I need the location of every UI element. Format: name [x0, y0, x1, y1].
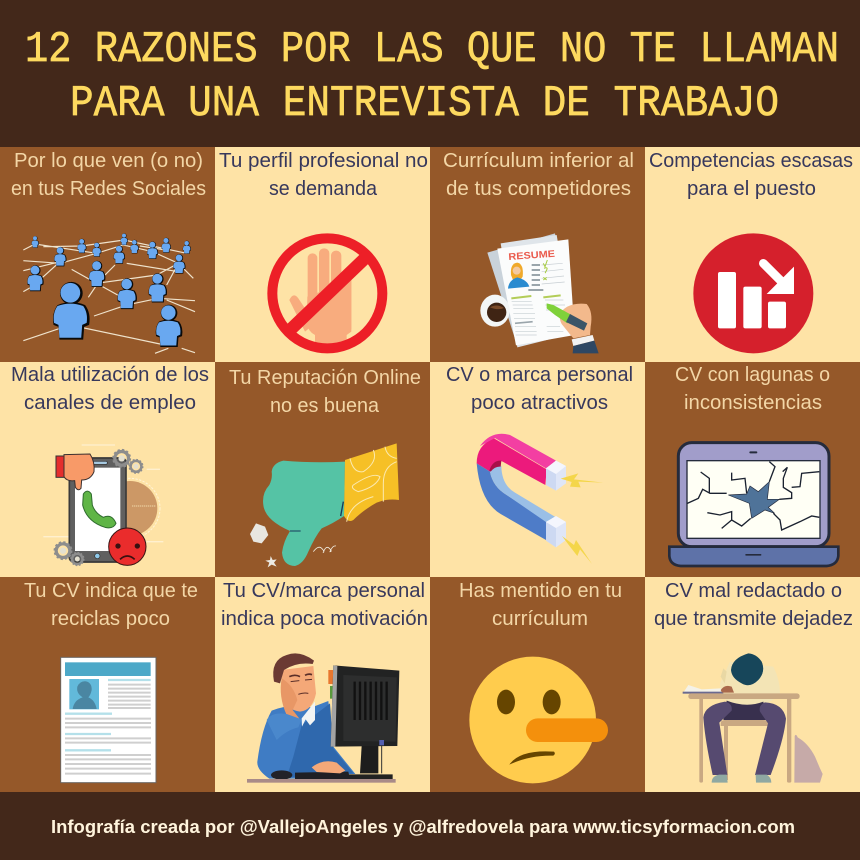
heading: curriculum inferior	[443, 149, 634, 200]
heading: has mentido	[459, 579, 622, 630]
icon: network of people	[23, 233, 195, 353]
heading: perfil profesional: se demanda	[269, 177, 378, 200]
icon: cracked laptop	[669, 443, 838, 566]
title: PARA UNA ENTREVISTA DE TRABAJO	[70, 79, 779, 129]
panel: lagunas	[645, 362, 860, 577]
heading: curriculum inferior: de tus competidores	[446, 177, 631, 200]
heading: poca motivacion: Tu CV/marca personal	[223, 579, 425, 602]
heading: perfil profesional	[219, 149, 428, 200]
panel: canales de empleo	[0, 362, 215, 577]
heading: competencias escasas	[649, 149, 853, 200]
icon: thumb down	[250, 443, 399, 567]
panel: competencias escasas	[645, 147, 860, 362]
heading: cv poco atractivo	[446, 363, 633, 414]
icon: phone with thumb down and sad face	[43, 445, 163, 565]
heading: canales de empleo: Mala utilización de los	[11, 363, 209, 386]
heading: cv poco atractivo: CV o marca personal	[446, 363, 633, 386]
heading: lagunas: CV con lagunas o	[675, 363, 830, 386]
heading: reputacion online: no es buena	[270, 394, 380, 417]
panel: mal redactado	[645, 577, 860, 792]
heading: poca motivacion: indica poca motivación	[221, 607, 428, 630]
heading: curriculum inferior: Currículum inferior al	[443, 149, 634, 172]
heading: canales de empleo: canales de empleo	[24, 391, 196, 414]
panel: perfil profesional	[215, 147, 430, 362]
heading: competencias escasas: para el puesto	[687, 177, 816, 200]
icon: student asleep at desk	[683, 653, 823, 783]
panel: te reciclas poco	[0, 577, 215, 792]
icon: bored man at computer	[247, 653, 399, 783]
icon: cv document	[61, 657, 156, 783]
heading: lagunas	[675, 363, 830, 414]
heading: has mentido: currículum	[492, 607, 588, 630]
icon: falling bar chart	[693, 233, 813, 353]
heading: reputacion online: Tu Reputación Online	[229, 366, 421, 389]
heading: lagunas: inconsistencias	[684, 391, 822, 414]
footer credit: Infografía creada por @VallejoAngeles y @alfredovela para www.ticsyformacion.com	[51, 817, 795, 837]
heading: mal redactado: que transmite dejadez	[654, 607, 853, 630]
footer band	[0, 792, 860, 860]
panel: reputacion online	[215, 362, 430, 577]
header band	[0, 0, 860, 147]
heading: reputacion online	[229, 366, 421, 417]
icon: prohibited hand	[272, 238, 382, 348]
heading: poca motivacion	[221, 579, 428, 630]
panel: poca motivacion	[215, 577, 430, 792]
heading: mal redactado: CV mal redactado o	[665, 579, 842, 602]
heading: redes sociales: en tus Redes Sociales	[11, 177, 206, 200]
icon: magnet	[477, 434, 603, 564]
panel: cv poco atractivo	[430, 362, 645, 577]
heading: te reciclas poco: reciclas poco	[51, 607, 170, 630]
icon: resume with marker: RESUME	[508, 249, 556, 263]
heading: redes sociales	[11, 149, 206, 200]
heading: competencias escasas: Competencias escasas	[649, 149, 853, 172]
panel: has mentido	[430, 577, 645, 792]
heading: te reciclas poco	[24, 579, 198, 630]
heading: redes sociales: Por lo que ven (o no)	[14, 149, 203, 172]
panel: curriculum inferior	[430, 147, 645, 362]
heading: cv poco atractivo: poco atractivos	[471, 391, 608, 414]
title	[25, 25, 839, 129]
heading: has mentido: Has mentido en tu	[459, 579, 622, 602]
heading: te reciclas poco: Tu CV indica que te	[24, 579, 198, 602]
icon: lying face emoji	[469, 657, 608, 783]
panel: redes sociales	[0, 147, 215, 362]
heading: canales de empleo	[11, 363, 209, 414]
icon: resume with marker	[480, 233, 599, 353]
heading: perfil profesional: Tu perfil profesional no	[219, 149, 428, 172]
heading: mal redactado	[654, 579, 853, 630]
